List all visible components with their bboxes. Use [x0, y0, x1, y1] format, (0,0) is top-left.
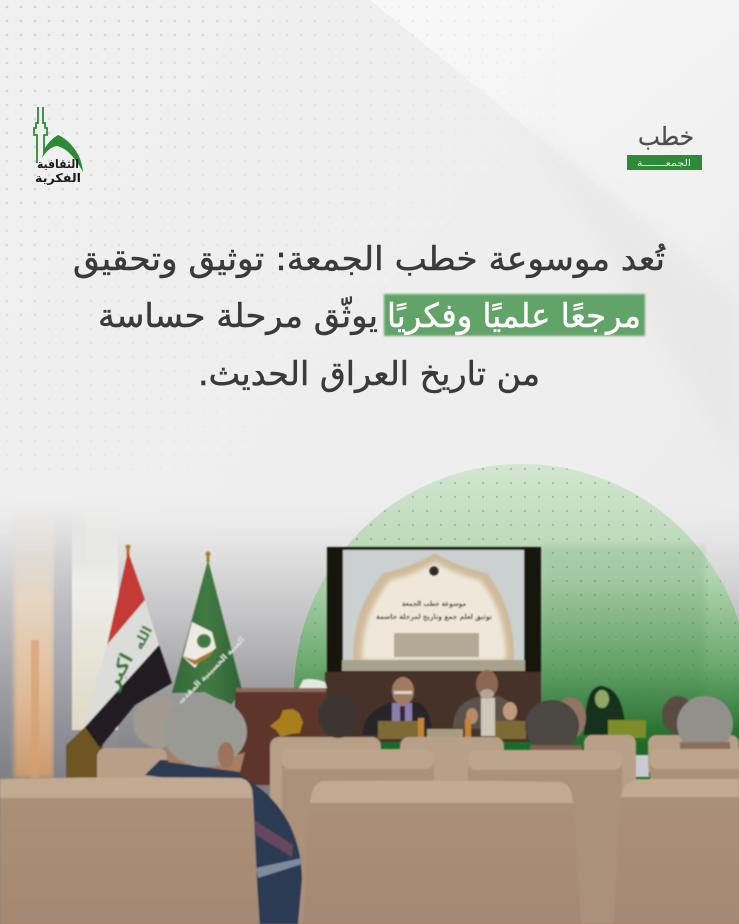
screen subtitle: توثيق لعلم جمع وتاريخ لمرحلة حاسمة: [376, 612, 492, 621]
screen ornament strip: [342, 660, 525, 671]
desk items and name plates: [378, 718, 526, 739]
flag emblem: [182, 622, 216, 668]
logo: الفكرية: [35, 171, 81, 185]
panelist left: [362, 677, 432, 735]
podium back panel: [325, 672, 541, 742]
flag: Iraq: اكبر: [101, 650, 138, 694]
flag: Iraq: [85, 544, 172, 748]
photo: wall backdrop: [0, 490, 739, 924]
series tag text: الجمعـــــــة: [637, 159, 691, 169]
front row chairs: [0, 777, 739, 924]
screen arch: [353, 553, 514, 660]
screen arch inner: [362, 562, 506, 660]
green circle: [294, 464, 739, 920]
screen calligraphy block: [394, 633, 479, 657]
highlight box: [384, 294, 645, 336]
lectern with emblem: [235, 679, 327, 785]
screen title: موسوعة خطب الجمعة: [402, 599, 466, 608]
photo scene: [0, 500, 739, 924]
background: [6, 0, 726, 470]
presentation screen: [327, 547, 541, 673]
heads in the audience: [133, 694, 733, 755]
headline line 3: من تاريخ العراق الحديث.: [198, 354, 540, 393]
headline: [73, 239, 665, 393]
curtains: [0, 500, 118, 778]
wall shadow panel: [541, 545, 705, 745]
green circle dot texture: [290, 464, 739, 754]
gold emblem: [270, 709, 303, 737]
flag inscription: الله: [131, 624, 156, 653]
row two chairs: [282, 749, 739, 924]
row three chairs: [97, 735, 739, 857]
highlighted phrase: مرجعًا علميًا وفكريًا: [387, 296, 641, 335]
series label: [627, 122, 702, 170]
foreground man in navy shirt: [145, 697, 302, 924]
series title: خطب: [638, 122, 694, 151]
woman at the side: [584, 686, 646, 738]
flag: institution green: [172, 552, 246, 709]
logo calligraphy: الثقافية: [37, 157, 79, 171]
series tag: [627, 155, 702, 170]
screen emblem: [429, 566, 439, 576]
headline line 2: يوثّق مرحلة حساسة: [98, 296, 378, 336]
logo: [34, 107, 83, 185]
logo dome: [42, 135, 83, 172]
seated man far right back: [635, 696, 694, 777]
panelist right: [453, 670, 517, 736]
logo minaret: [34, 107, 47, 163]
flag calligraphy: العتبة الحسينية المقدسة: [172, 635, 246, 709]
headline line 1: تُعد موسوعة خطب الجمعة: توثيق وتحقيق: [73, 239, 665, 279]
